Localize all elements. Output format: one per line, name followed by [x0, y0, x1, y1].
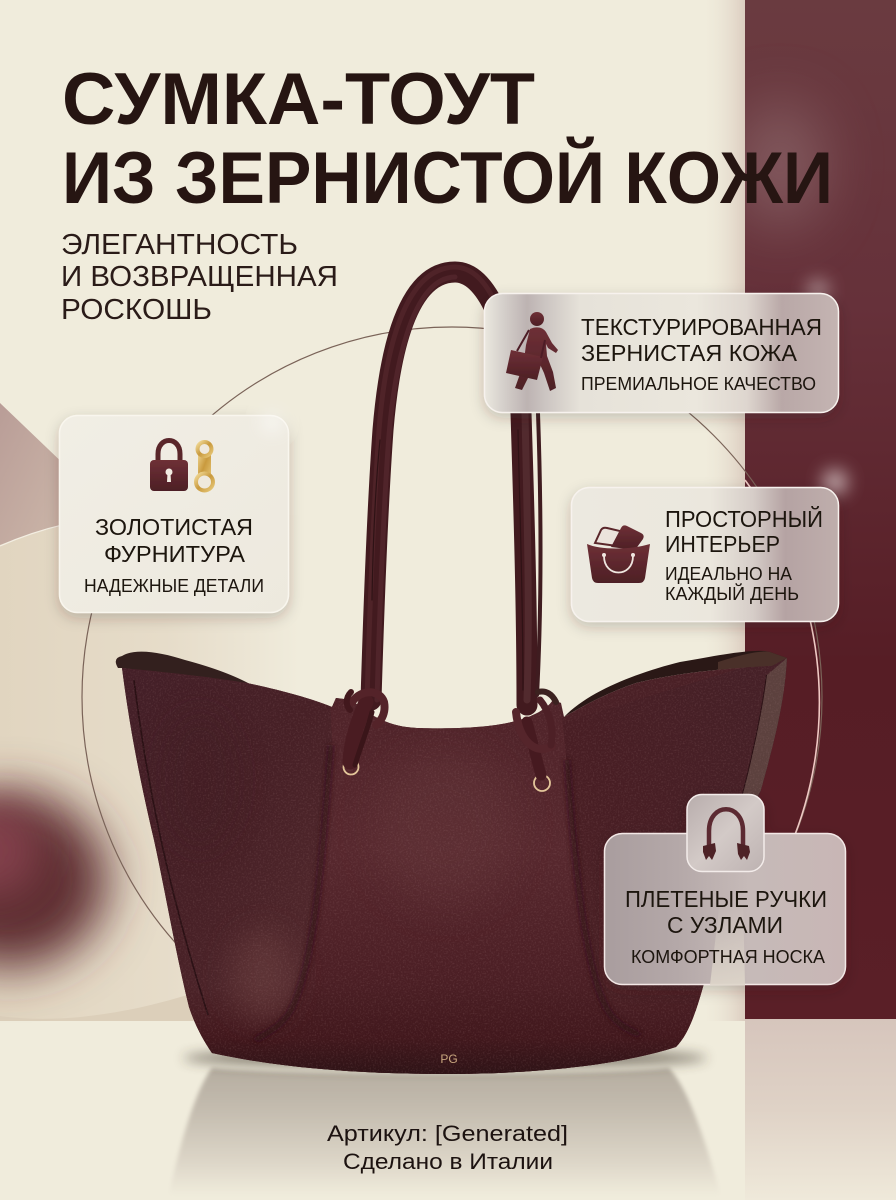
bag body [100, 650, 800, 1080]
card text: textured leather: ЗЕРНИСТАЯ КОЖА [581, 340, 798, 366]
card text: spacious interior: ИНТЕРЬЕР [665, 531, 780, 557]
subtitle: И ВОЗВРАЩЕННАЯ [61, 261, 338, 293]
icon: bag with contents [587, 525, 650, 583]
card: textured leather [484, 294, 838, 412]
card text: gold hardware: ФУРНИТУРА [104, 541, 246, 567]
icon: padlock [150, 440, 188, 491]
card text: gold hardware [84, 514, 264, 596]
footer: article and origin [327, 1121, 568, 1174]
bag shadow [183, 1047, 707, 1069]
bag inner rim [116, 651, 787, 717]
icon tile: braided handle [687, 794, 764, 872]
icon: person with tote bag [506, 312, 558, 391]
subtitle: ЭЛЕГАНТНОСТЬ [61, 229, 298, 261]
card text: braided handles [625, 886, 827, 967]
card text: textured leather: ПРЕМИАЛЬНОЕ КАЧЕСТВО [581, 374, 816, 394]
card text: braided handles: С УЗЛАМИ [667, 912, 783, 938]
title: ИЗ ЗЕРНИСТОЙ КОЖИ [62, 137, 833, 219]
title [62, 59, 833, 219]
card: braided handles [604, 794, 846, 985]
logo PG: PG [440, 1052, 458, 1066]
knots and rings [344, 691, 556, 791]
footer: article and origin: Сделано в Италии [343, 1149, 553, 1174]
card text: braided handles: КОМФОРТНАЯ НОСКА [631, 947, 825, 967]
icon: gold clasp [196, 442, 213, 490]
card text: spacious interior [665, 505, 823, 604]
subtitle: РОСКОШЬ [61, 294, 212, 326]
card text: gold hardware: НАДЕЖНЫЕ ДЕТАЛИ [84, 576, 264, 596]
blurred burgundy sphere [0, 792, 108, 968]
bag reflection [168, 1068, 722, 1200]
back straps [367, 267, 540, 705]
subtitle [61, 229, 338, 326]
card text: braided handles: ПЛЕТЕНЫЕ РУЧКИ [625, 886, 827, 912]
card text: spacious interior: КАЖДЫЙ ДЕНЬ [665, 583, 799, 604]
thin circle outline [82, 327, 822, 1067]
card text: spacious interior: ИДЕАЛЬНО НА [665, 564, 792, 584]
card text: textured leather: ТЕКСТУРИРОВАННАЯ [581, 314, 822, 340]
card: spacious interior [572, 488, 838, 622]
background [723, 0, 896, 1180]
card text: textured leather [581, 314, 822, 394]
card text: gold hardware: ЗОЛОТИСТАЯ [95, 514, 253, 540]
handbag illustration [100, 267, 800, 1080]
left backdrop shapes [0, 403, 300, 1021]
footer: article and origin: Артикул: [Generated] [327, 1121, 568, 1146]
card: gold hardware [60, 413, 288, 612]
card text: spacious interior: ПРОСТОРНЫЙ [665, 505, 823, 532]
title: СУМКА-ТОУТ [62, 59, 535, 140]
